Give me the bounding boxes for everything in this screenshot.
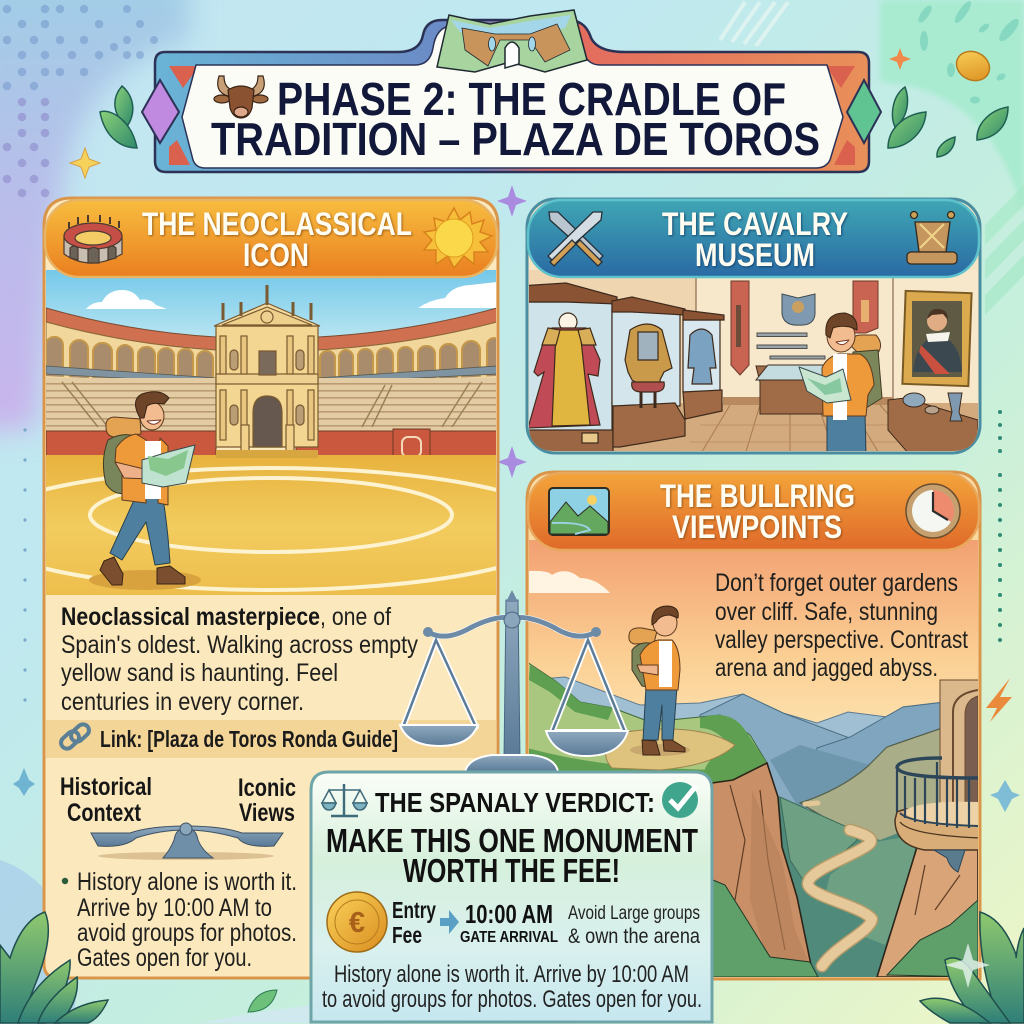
heading	[662, 206, 848, 273]
text block: description	[61, 603, 418, 716]
icon: purple star top	[497, 185, 527, 217]
blue ridges	[700, 694, 848, 804]
icon: chain link	[59, 722, 91, 751]
left field	[529, 662, 767, 770]
icon: sun	[424, 208, 492, 268]
icon: right leaves top	[888, 87, 1008, 157]
icon: gold coin top right	[952, 46, 994, 86]
header band: cavalry museum	[528, 200, 979, 277]
display table	[756, 365, 825, 414]
left cliff	[712, 763, 812, 975]
green valley	[778, 796, 916, 977]
header band: neoclassical icon	[45, 200, 497, 277]
display case: armour	[612, 297, 685, 447]
hiker with map	[799, 313, 882, 455]
text block: description: Spain's oldest. Walking across empty	[61, 631, 418, 659]
verdict heading: THE SPANALY VERDICT:	[375, 787, 655, 818]
icon: blue diamond right	[990, 780, 1020, 812]
icon: colosseum	[64, 215, 122, 263]
header band: bullring viewpoints	[528, 473, 979, 550]
icon: orange star	[889, 48, 911, 70]
icon: blue diamond left	[13, 768, 35, 796]
balance labels	[60, 773, 296, 827]
icon: bull head	[214, 76, 268, 118]
illustration: bullring scene	[46, 270, 496, 595]
left cliff foliage	[712, 880, 818, 977]
gate arrival time	[460, 899, 558, 946]
heading: TRADITION – PLAZA DE TOROS	[211, 113, 820, 165]
arcade railing	[46, 366, 496, 378]
heading	[211, 73, 820, 165]
wall swords	[757, 333, 825, 359]
central pavilion	[214, 285, 320, 461]
icon: crossed swords	[548, 212, 603, 266]
link band	[46, 720, 496, 758]
text block: tips: Arrive by 10:00 AM to	[77, 894, 272, 922]
panel body	[527, 199, 980, 453]
text block: tips	[62, 868, 297, 972]
gem left	[142, 80, 179, 143]
icon: white sparkle	[945, 943, 990, 988]
text block: viewpoints: Don’t forget outer gardens	[715, 569, 958, 597]
icon: large balance scale	[400, 590, 628, 772]
verdict statement: WORTH THE FEE!	[403, 852, 620, 889]
clouds	[86, 282, 497, 309]
river	[805, 803, 872, 966]
heading: PHASE 2: THE CRADLE OF	[277, 73, 786, 125]
entry fee label: Entry	[392, 897, 436, 923]
arches	[46, 336, 496, 378]
balance labels: Views	[239, 799, 295, 827]
cloud	[529, 571, 610, 593]
icon: armour stand	[907, 212, 957, 264]
text block: tips: Gates open for you.	[77, 944, 252, 972]
shield	[782, 294, 815, 325]
illustration: museum interior	[520, 270, 978, 455]
title banner	[142, 10, 881, 172]
banners	[731, 281, 878, 375]
text block: description: , one of	[320, 603, 391, 631]
display case: blue coat	[683, 310, 724, 419]
illustration: cliff valley	[527, 540, 985, 980]
verdict summary: History alone is worth it. Arrive by 10:00 AM	[334, 961, 689, 988]
banner frame	[155, 20, 869, 172]
tower	[940, 680, 980, 815]
right cliff foliage	[887, 900, 978, 977]
text block: viewpoints: valley perspective. Contrast	[715, 626, 968, 654]
icon: landscape picture	[549, 488, 609, 535]
panel body	[527, 472, 980, 979]
icon: folded map with bridge	[437, 10, 587, 72]
text block: tips: avoid groups for photos.	[77, 919, 297, 947]
text block: tips: History alone is worth it.	[77, 868, 297, 896]
heading: MUSEUM	[695, 237, 815, 273]
icon: bottom-right foliage	[920, 912, 1024, 1023]
hiker walking with map	[89, 392, 201, 590]
sand arena	[46, 455, 498, 600]
text block: viewpoints	[715, 569, 968, 682]
text block: viewpoints: arena and jagged abyss.	[715, 654, 938, 682]
hedge	[527, 665, 767, 785]
text block: viewpoints: over cliff. Safe, stunning	[715, 598, 938, 626]
ledge path	[606, 729, 735, 770]
avoid large groups note	[568, 903, 700, 948]
wooden floor	[529, 403, 978, 455]
roof	[46, 308, 497, 350]
heading	[660, 478, 855, 545]
panel: the cavalry museum	[520, 199, 980, 455]
avoid large groups note: & own the arena	[568, 925, 700, 948]
icon: small leaf	[248, 990, 277, 1012]
text block: description: Neoclassical masterpiece	[61, 603, 320, 631]
arrow	[440, 910, 459, 934]
gate arrival time: 10:00 AM	[465, 899, 553, 929]
icon: euro coin: €	[349, 907, 365, 939]
portrait	[902, 291, 972, 386]
icon: small balance	[91, 823, 283, 860]
verdict statement	[326, 822, 698, 889]
verdict summary: to avoid groups for photos. Gates open for you.	[322, 986, 702, 1013]
arcade walls	[46, 322, 497, 382]
panel: the neoclassical icon	[42, 196, 500, 980]
balance labels: Context	[67, 799, 142, 827]
heading	[142, 206, 412, 273]
barrier gate	[392, 428, 430, 455]
panel: the bullring viewpoints	[527, 472, 985, 980]
icon: bottom-left foliage	[0, 912, 108, 1023]
heading: VIEWPOINTS	[672, 509, 842, 545]
icon: purple star middle	[497, 446, 527, 478]
heading: THE BULLRING	[660, 478, 855, 514]
text block: description: centuries in every corner.	[61, 688, 304, 716]
side cabinet	[888, 393, 978, 455]
icon: check mark	[662, 782, 698, 818]
link band: Link: [Plaza de Toros Ronda Guide]	[100, 726, 398, 752]
entry fee label: Fee	[392, 922, 422, 948]
balcony	[895, 758, 980, 872]
heading: THE CAVALRY	[662, 206, 848, 242]
hiker standing	[629, 606, 690, 756]
heading: THE NEOCLASSICAL	[142, 206, 412, 242]
verdict statement: MAKE THIS ONE MONUMENT	[326, 822, 698, 859]
icon: scales	[322, 784, 367, 816]
far mountains	[551, 676, 940, 812]
heading: ICON	[243, 237, 309, 273]
balance labels: Historical	[60, 773, 152, 801]
panel: the spanaly verdict	[311, 772, 712, 1022]
barrier	[46, 430, 496, 455]
arena rings	[46, 466, 496, 592]
icon: left leaves top	[100, 86, 137, 148]
panel body	[44, 198, 498, 978]
text block: description: yellow sand is haunting. Feel	[61, 659, 338, 687]
entry fee label	[392, 897, 436, 948]
display case: dress	[520, 283, 617, 455]
icon: gold sparkle	[70, 148, 100, 178]
seating stands	[46, 378, 498, 433]
balance labels: Iconic	[238, 774, 296, 802]
gem right	[847, 80, 881, 143]
icon: orange lightning	[986, 678, 1012, 722]
icon: euro coin	[327, 892, 387, 952]
gate arrival time: GATE ARRIVAL	[460, 929, 558, 946]
avoid large groups note: Avoid Large groups	[568, 903, 700, 924]
icon: clock	[906, 484, 960, 538]
tan slope	[798, 728, 940, 840]
verdict summary	[322, 961, 702, 1013]
right cliff	[877, 847, 978, 977]
